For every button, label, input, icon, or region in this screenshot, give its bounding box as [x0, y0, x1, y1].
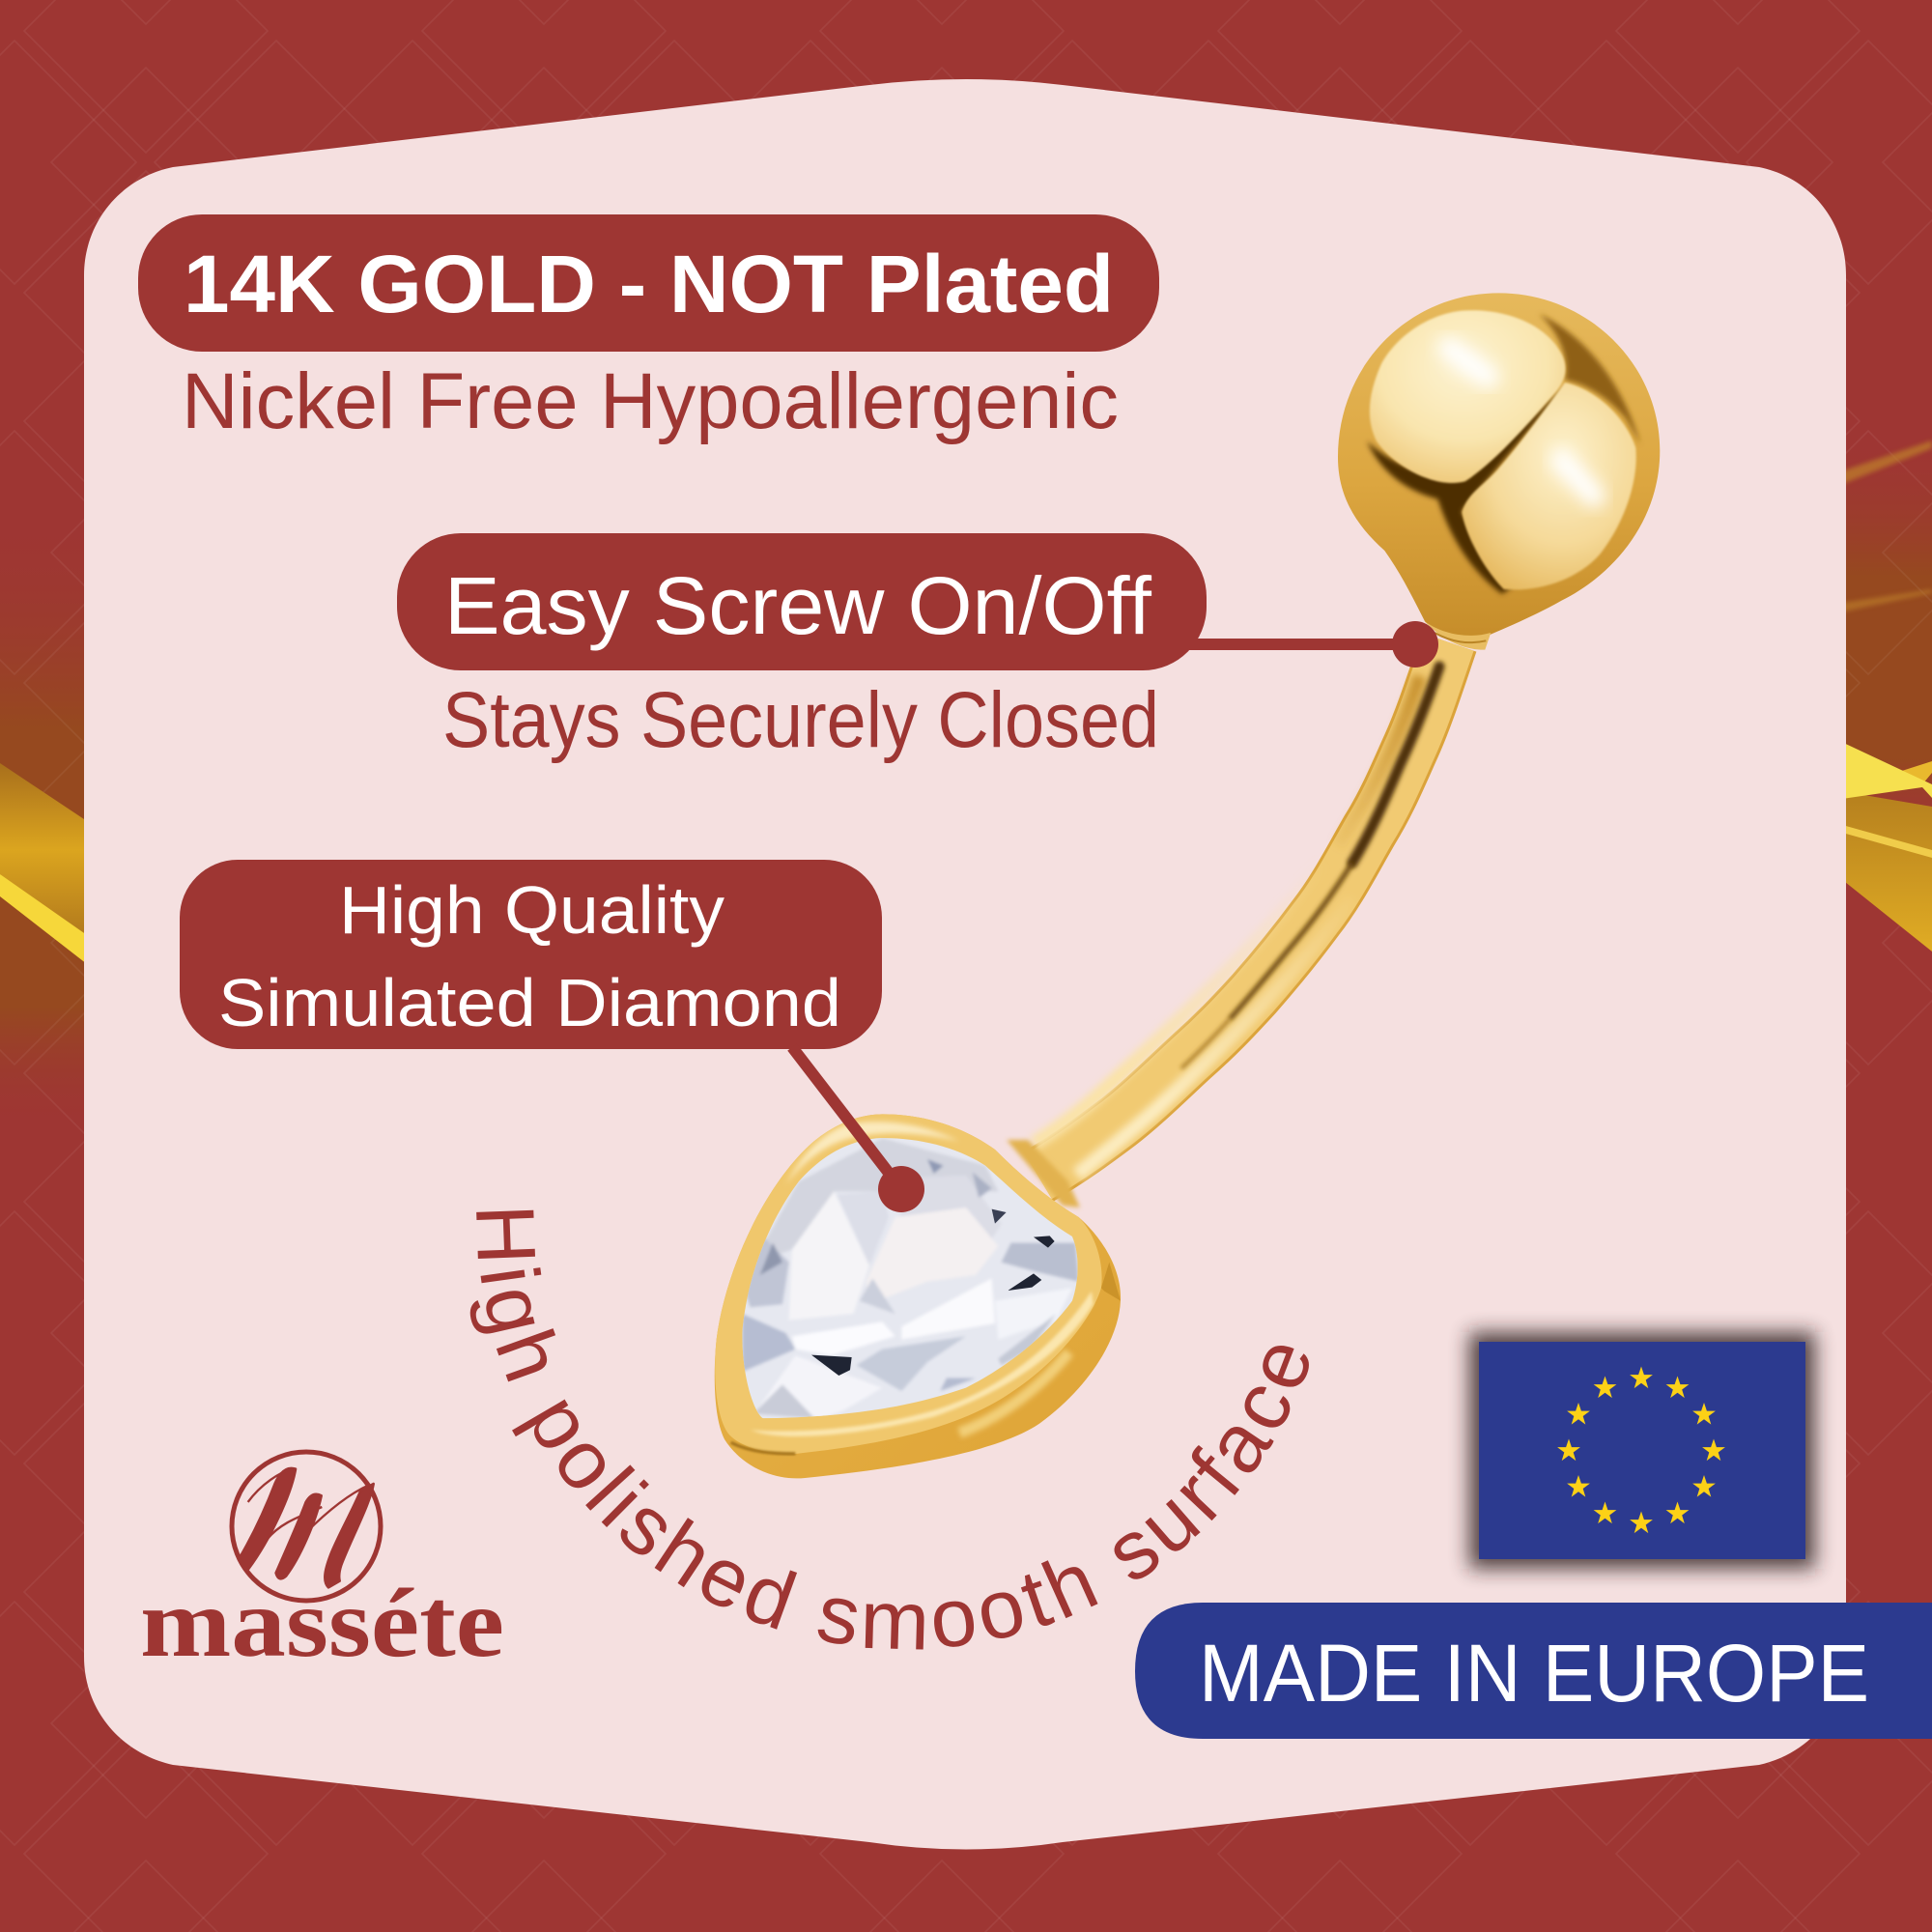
product: gold belly ring: [715, 293, 1660, 1478]
subheading: stays closed: Stays Securely Closed: [442, 676, 1159, 764]
callout pill: simulated diamond: High Quality: [339, 872, 724, 948]
callout pill: simulated diamond: [180, 860, 882, 1049]
heading pill: 14K gold: [138, 214, 1159, 352]
callout pill: simulated diamond: Simulated Diamond: [218, 965, 841, 1040]
icon: EU flag: [1469, 1332, 1815, 1569]
heading pill: 14K gold: 14K GOLD - NOT Plated: [184, 239, 1114, 329]
banner: made in europe: [1135, 1603, 1932, 1739]
logo: massete: masséte: [140, 1569, 504, 1678]
connector: screw callout to ball: [1179, 621, 1438, 668]
curved text: high polished surface: High polished smooth surface: [469, 1209, 1309, 1650]
shank: [1007, 642, 1449, 1208]
heart bezel with simulated diamond: [715, 1114, 1121, 1478]
logo: massete: [140, 1452, 504, 1678]
connector: diamond callout to gem: [792, 1047, 924, 1212]
callout pill: easy screw: [397, 533, 1207, 670]
callout pill: easy screw: Easy Screw On/Off: [444, 560, 1152, 651]
ball: [1338, 293, 1660, 650]
banner: made in europe: MADE IN EUROPE: [1199, 1628, 1869, 1719]
subheading: nickel free: Nickel Free Hypoallergenic: [182, 357, 1119, 445]
gem: [741, 1137, 1082, 1420]
